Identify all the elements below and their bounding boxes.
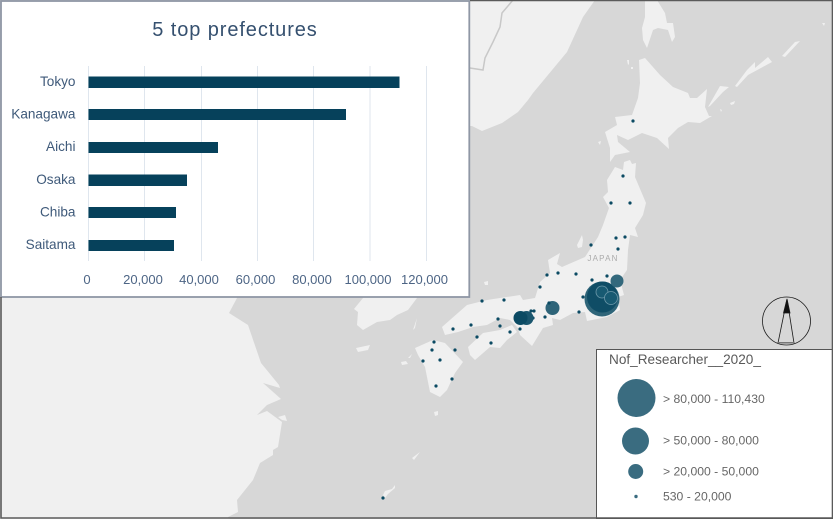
land: Asian mainland west <box>0 200 282 519</box>
land: Shikoku <box>468 325 517 360</box>
category labels: Saitama <box>26 237 76 252</box>
chart title: 5 top prefectures <box>152 19 318 41</box>
category labels: Osaka <box>36 172 76 187</box>
legend item: medium class <box>628 464 759 479</box>
map: large prefecture bubbles <box>514 274 624 325</box>
x axis labels: 100,000 <box>344 272 392 287</box>
panel: bar chart 5 top prefectures <box>1 1 469 297</box>
map: border line <box>470 0 513 70</box>
bubble: Ibaraki <box>610 274 624 288</box>
label: JAPAN: JAPAN <box>587 254 619 263</box>
category labels: Aichi <box>46 139 76 154</box>
land: Kuril islands <box>708 86 729 107</box>
bubble: Kyoto <box>520 311 534 325</box>
category labels <box>11 74 76 252</box>
x axis labels: 120,000 <box>401 272 448 287</box>
land: Russian Far East <box>400 0 595 131</box>
x axis labels: 0 <box>83 272 91 287</box>
legend item: largest class: > 80,000 - 110,430 <box>663 392 765 406</box>
bubble: Kanagawa <box>587 282 618 312</box>
bubble: Tokyo <box>584 282 620 316</box>
category labels: Kanagawa <box>11 106 76 122</box>
legend item: largest class <box>618 379 765 417</box>
land: Kyushu <box>415 340 463 397</box>
legend item: large class <box>622 428 759 454</box>
land: Hokkaido <box>605 58 712 162</box>
x axis labels: 20,000 <box>123 272 163 287</box>
land: Sakhalin <box>642 0 675 48</box>
icon: north arrow <box>762 297 810 345</box>
legend item: large class: > 50,000 - 80,000 <box>663 434 759 448</box>
legend item: medium class: > 20,000 - 50,000 <box>663 464 759 478</box>
panel: legend <box>596 350 832 518</box>
category labels: Tokyo <box>40 74 76 89</box>
x axis labels: 40,000 <box>179 272 219 287</box>
bubble: Chiba <box>604 292 618 304</box>
land: small islands <box>413 318 417 330</box>
bubble: Saitama <box>596 286 608 298</box>
bubble: Aichi <box>546 301 560 315</box>
legend item: small class: 530 - 20,000 <box>663 490 732 504</box>
land: Korea <box>354 280 425 330</box>
legend title: Nof_Researcher__2020_ <box>609 352 761 367</box>
x axis labels: 80,000 <box>292 272 332 287</box>
bubble: Osaka <box>514 311 528 325</box>
x axis labels <box>83 272 448 287</box>
x axis labels: 60,000 <box>236 272 275 287</box>
map: small prefecture dots <box>381 119 635 500</box>
land: Honshu <box>442 160 646 346</box>
bars <box>88 76 400 251</box>
category labels: Chiba <box>40 204 76 220</box>
